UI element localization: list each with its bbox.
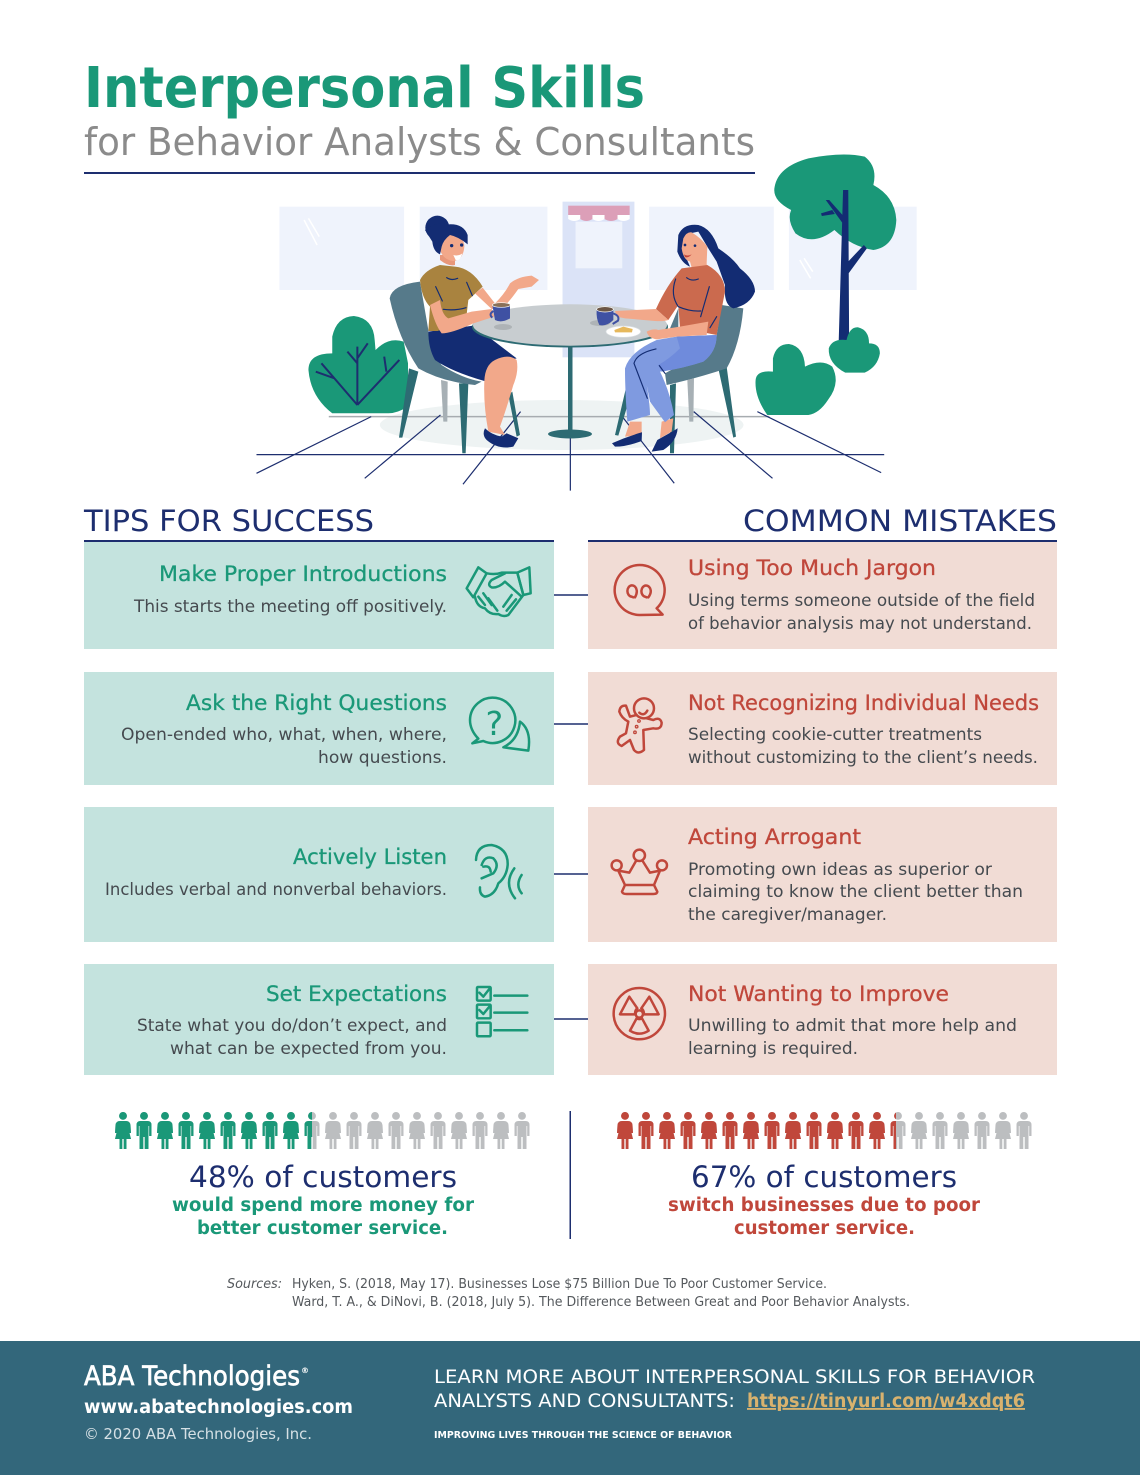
cafe windows (279, 207, 917, 290)
body: the caregiver/manager. (688, 905, 887, 924)
right woman: lower body (612, 335, 717, 452)
panel: set expectations (84, 964, 554, 1075)
stat: 48 percent: better customer service. (197, 1218, 448, 1239)
learn more: https://tinyurl.com/w4xdqt6 (747, 1391, 1025, 1412)
center divider (570, 1111, 571, 1239)
stat: 67 percent (668, 1160, 981, 1239)
cafe backdrop, plants and floor (256, 155, 917, 491)
subtitle: for Behavior Analysts & Consultants (84, 120, 755, 164)
icon: crown (612, 850, 667, 894)
icon: quote bubble (615, 565, 665, 615)
left bush (308, 316, 408, 413)
right chair (615, 305, 743, 453)
panel: acting arrogant (588, 807, 1057, 942)
body (121, 725, 447, 767)
panel: not wanting to improve (588, 964, 1057, 1075)
body: Includes verbal and nonverbal behaviors. (105, 880, 447, 899)
heading: Make Proper Introductions (159, 562, 447, 587)
body (688, 860, 1023, 924)
body: Using terms someone outside of the field (688, 591, 1035, 610)
door (563, 202, 634, 357)
sources: Ward, T. A., & DiNovi, B. (2018, July 5). The Difference Between Great and Poor Behavior Analysts. (292, 1295, 910, 1310)
copyright: © 2020 ABA Technologies, Inc. (84, 1425, 312, 1443)
learn more: ANALYSTS AND CONSULTANTS: (434, 1391, 735, 1412)
stat: 48 percent (172, 1160, 475, 1239)
table (472, 304, 668, 438)
icon: question bubbles (470, 698, 529, 751)
icon: question bubbles: ? (485, 704, 503, 743)
heading: tips for success: TIPS FOR SUCCESS (83, 504, 374, 538)
heading: Not Wanting to Improve (688, 982, 949, 1007)
body (137, 1016, 447, 1058)
footer (0, 1341, 1140, 1475)
people chart: 48 percent (115, 1112, 530, 1149)
stat: 67 percent: customer service. (734, 1218, 915, 1239)
website: www.abatechnologies.com (84, 1397, 353, 1418)
body: of behavior analysis may not understand. (688, 614, 1032, 633)
body: how questions. (318, 748, 447, 767)
left woman: upper body (420, 216, 539, 333)
right bush (756, 344, 836, 415)
icon: handshake (467, 567, 531, 616)
icon: ear (476, 845, 522, 898)
body: without customizing to the client’s needs. (688, 748, 1038, 767)
illustration: two women at a cafe table (256, 155, 917, 491)
icon: gingerbread (618, 698, 662, 752)
panel: not recognizing individual needs (588, 672, 1057, 785)
stat: 48 percent: 48% of customers (189, 1160, 457, 1194)
connectors (554, 595, 588, 1019)
people chart: 67 percent (617, 1112, 1032, 1149)
stat: 48 percent: would spend more money for (172, 1195, 475, 1216)
body: Promoting own ideas as superior or (688, 860, 992, 879)
panel: actively listen (84, 807, 554, 942)
footer logo: ® (301, 1366, 309, 1375)
icon: checklist (477, 987, 527, 1036)
sources: Hyken, S. (2018, May 17). Businesses Lose $75 Billion Due To Poor Customer Service. (292, 1277, 827, 1292)
ground shadow (380, 400, 744, 450)
body: what can be expected from you. (170, 1039, 447, 1058)
sources (227, 1277, 910, 1310)
body: This starts the meeting off positively. (133, 597, 447, 616)
heading: Using Too Much Jargon (688, 556, 936, 581)
body: claiming to know the client better than (688, 882, 1023, 901)
panel: using too much jargon (588, 540, 1057, 649)
right woman: upper body (615, 225, 755, 339)
title rule (84, 172, 755, 174)
floor lines (256, 412, 884, 491)
body (688, 1016, 1017, 1058)
panel: make proper introductions (84, 540, 554, 649)
right coffee cup (597, 307, 618, 325)
stat: 67 percent: switch businesses due to poor (668, 1195, 981, 1216)
plate with cake (606, 326, 641, 337)
heading: Actively Listen (293, 845, 447, 870)
body (688, 591, 1035, 633)
body: Selecting cookie-cutter treatments (688, 725, 982, 744)
heading: Ask the Right Questions (186, 691, 447, 716)
learn more: LEARN MORE ABOUT INTERPERSONAL SKILLS FOR BEHAVIOR (434, 1367, 1035, 1388)
panel: ask the right questions (84, 672, 554, 785)
heading: common mistakes: COMMON MISTAKES (743, 504, 1057, 538)
heading: Set Expectations (266, 982, 447, 1007)
learn more (434, 1367, 1035, 1412)
title: Interpersonal Skills (84, 56, 645, 121)
body: learning is required. (688, 1039, 858, 1058)
tree (774, 155, 896, 373)
body: State what you do/don’t expect, and (137, 1016, 447, 1035)
heading: Acting Arrogant (688, 825, 861, 850)
icon: radiation (614, 988, 665, 1039)
left coffee cup (491, 303, 510, 321)
stat: 67 percent: 67% of customers (691, 1160, 957, 1194)
sources: Sources: (227, 1277, 282, 1292)
body: Unwilling to admit that more help and (688, 1016, 1017, 1035)
tagline: IMPROVING LIVES THROUGH THE SCIENCE OF BEHAVIOR (434, 1430, 732, 1441)
left chair (390, 282, 520, 453)
left woman: lower body (428, 326, 518, 447)
body (688, 725, 1038, 767)
footer logo: ABA Technologies (84, 1361, 300, 1392)
heading: Not Recognizing Individual Needs (688, 691, 1039, 716)
body: Open-ended who, what, when, where, (121, 725, 447, 744)
